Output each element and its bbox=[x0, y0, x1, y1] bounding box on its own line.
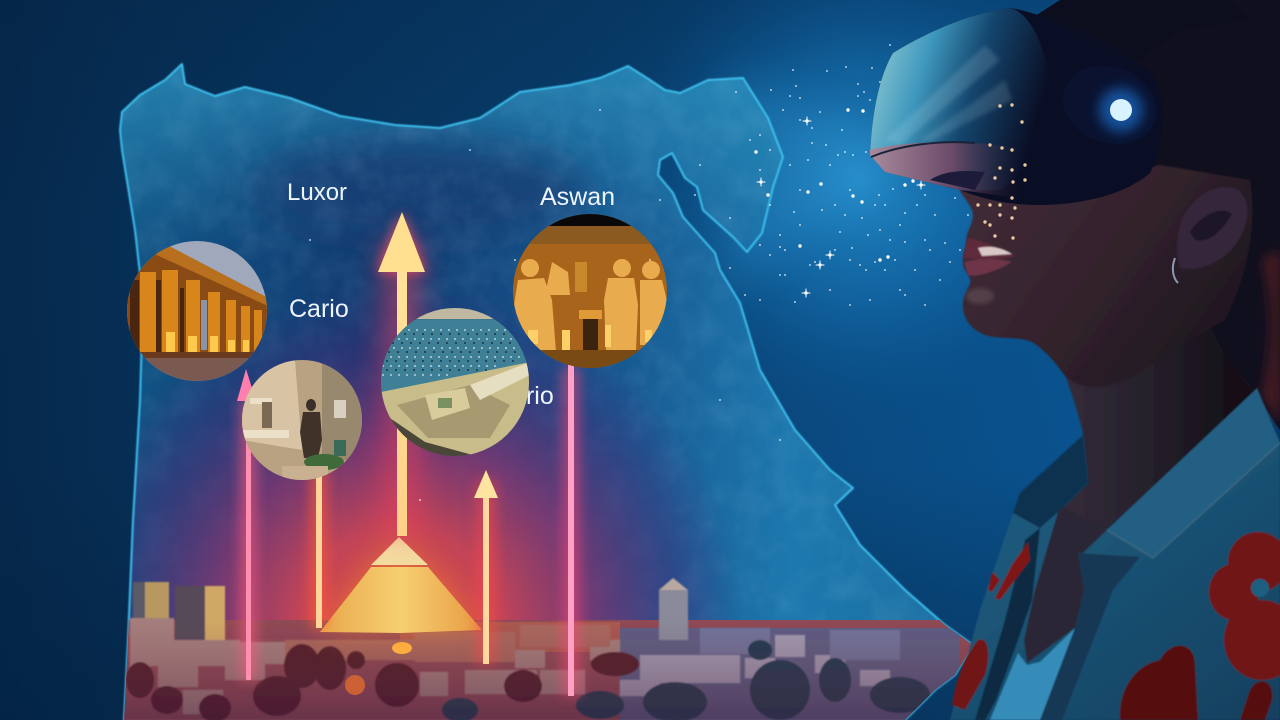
hair bbox=[1060, 0, 1280, 430]
face bbox=[958, 165, 1252, 387]
arrow: central main bbox=[378, 212, 425, 536]
t-shirt bbox=[990, 628, 1075, 720]
jacket bbox=[950, 388, 1280, 720]
flower left lower bbox=[952, 639, 988, 710]
tower: centre left bbox=[175, 586, 225, 643]
ear bbox=[1177, 187, 1247, 269]
arrow: right pink bbox=[562, 360, 580, 696]
collar left bbox=[1013, 435, 1088, 528]
photo: statue and building bbox=[242, 360, 367, 481]
star particles bbox=[310, 45, 1000, 500]
earring bbox=[1173, 258, 1178, 283]
glowing lens bbox=[1099, 88, 1143, 132]
flower left upper bbox=[988, 542, 1030, 600]
headset body bbox=[870, 8, 1163, 205]
photo: Abu Simbel temple bbox=[513, 214, 668, 369]
city skyline bbox=[120, 578, 980, 720]
headset side panel bbox=[1052, 53, 1168, 157]
arrow: far left pink bbox=[237, 369, 257, 680]
chest bbox=[1024, 505, 1107, 663]
trees bbox=[126, 644, 639, 720]
label: Aswan: Aswan bbox=[540, 183, 615, 211]
label: Cario: Cario bbox=[289, 295, 349, 323]
lips bbox=[963, 238, 1015, 276]
left front edge bbox=[975, 528, 1040, 720]
map of Egypt bbox=[120, 60, 980, 720]
neck bbox=[1050, 280, 1257, 530]
tower: left bbox=[133, 582, 169, 620]
arrow: small right bbox=[474, 470, 498, 664]
visor glass bbox=[870, 8, 1050, 198]
flower far right bbox=[1240, 681, 1272, 720]
woman with VR headset bbox=[870, 0, 1280, 720]
flower lower bbox=[1120, 646, 1198, 720]
flower right bbox=[1209, 532, 1280, 680]
headset strap bbox=[1035, 0, 1250, 60]
chin highlight bbox=[966, 288, 994, 304]
photo: Alexandria citadel and harbour bbox=[381, 307, 530, 457]
label: Cario partly hidden: Cario bbox=[494, 382, 554, 410]
photo: Luxor temple colonnade bbox=[126, 241, 268, 382]
label: Luxor: Luxor bbox=[287, 179, 347, 206]
pyramid bbox=[320, 537, 482, 633]
face stars bbox=[978, 105, 1025, 238]
placket bbox=[1040, 553, 1140, 720]
collar right bbox=[1107, 388, 1280, 558]
tower: right bbox=[659, 578, 688, 640]
arrow: statue bbox=[310, 470, 328, 628]
